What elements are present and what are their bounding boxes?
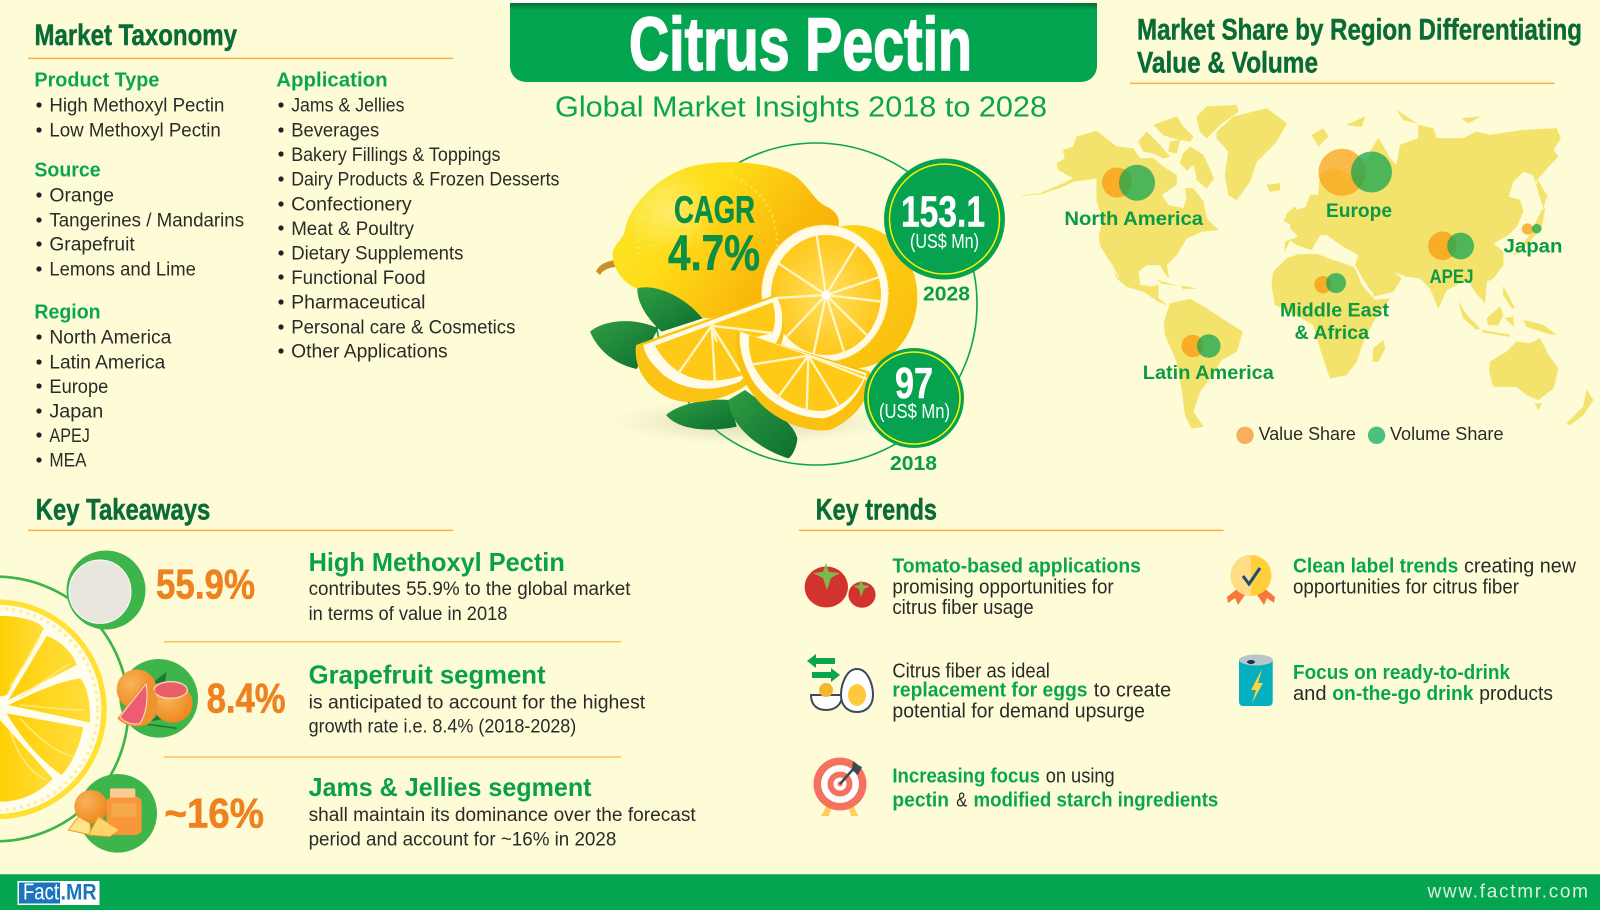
map region labels: North America (1064, 208, 1203, 230)
stat: grapefruit segment (207, 659, 646, 738)
list: application: Confectionery (291, 194, 412, 215)
stat: high methoxyl pectin: in terms of value in 2018 (309, 604, 507, 625)
list: application: Other Applications (291, 342, 448, 363)
list: region: MEA (49, 451, 87, 472)
list: application: Bakery Fillings & Toppings (291, 145, 500, 166)
title: Citrus Pectin (629, 2, 972, 86)
stat: grapefruit segment: is anticipated to account for the highest (309, 692, 646, 713)
panel: market share by region (1022, 13, 1593, 444)
list: application: Personal care & Cosmetics (291, 317, 515, 338)
bubbles: North America (1102, 165, 1155, 201)
trend: tomato-based applications: citrus fiber usage (892, 597, 1034, 619)
ring connecting market values (655, 143, 977, 465)
map region labels: Latin America (1143, 362, 1274, 384)
list: source: Tangerines / Mandarins (49, 210, 244, 231)
illustration: big lemon slice (0, 577, 128, 841)
badge: 2028 value: 153.1 (901, 188, 985, 237)
icon: egg replacement (807, 654, 873, 712)
badge: 2018 value: 97 (895, 359, 933, 408)
list: region: Japan (49, 401, 103, 422)
stat: jams and jellies segment: shall maintain its dominance over the forecast (309, 805, 696, 826)
stat: grapefruit segment: growth rate i.e. 8.4% (2018-2028) (309, 717, 576, 738)
map region labels: & Africa (1294, 322, 1369, 344)
list: application: Beverages (291, 120, 379, 141)
trend: clean label trends (1293, 555, 1577, 598)
map legend: Volume Share (1390, 424, 1504, 444)
list: application (276, 70, 559, 363)
list: product type: High Methoxyl Pectin (49, 96, 224, 117)
bubbles: Middle East and Africa (1314, 273, 1346, 293)
list: application: Application (276, 70, 388, 92)
trend: modified starch ingredients: modified starch ingredients (974, 790, 1218, 812)
badge: 2028 value: 2028 (923, 284, 970, 306)
stat: grapefruit segment: Grapefruit segment (309, 659, 546, 689)
trend: ready-to-drink: on-the-go drink (1332, 683, 1474, 705)
stat: jams and jellies segment: Jams & Jellies segment (309, 772, 592, 802)
footer bar (0, 874, 1600, 910)
bubbles: Japan (1522, 223, 1541, 235)
trend: tomato-based applications: promising opportunities for (892, 576, 1114, 598)
stat: jams and jellies segment (164, 772, 696, 850)
list: application: Dairy Products & Frozen Desserts (291, 170, 559, 191)
title banner (494, 0, 1097, 86)
stat: high methoxyl pectin (156, 547, 631, 625)
map region labels: Japan (1504, 235, 1562, 257)
list: product type (34, 70, 224, 141)
list: region: North America (49, 328, 172, 349)
map region labels: Europe (1326, 200, 1392, 222)
trend: replacement for eggs: to create (1094, 680, 1171, 702)
stat: high methoxyl pectin: contributes 55.9% to the global market (309, 579, 631, 600)
trend: tomato-based applications (892, 555, 1141, 619)
stat: high methoxyl pectin: High Methoxyl Pectin (309, 547, 565, 577)
icon: drink can (1239, 654, 1273, 706)
trend: modified starch ingredients: pectin (892, 790, 949, 812)
icon: jam jar and oranges (68, 774, 157, 853)
heading: market share: Value & Volume (1137, 47, 1318, 80)
list: application: Pharmaceutical (291, 293, 426, 314)
panel: market taxonomy (28, 19, 559, 472)
stat: high methoxyl pectin: 55.9% (156, 560, 255, 607)
trend: ready-to-drink: and (1293, 683, 1326, 705)
list: source: Orange (49, 186, 114, 207)
badge: 2018 value: 2018 (890, 453, 937, 475)
trend: modified starch ingredients: & (956, 790, 968, 812)
heading: market taxonomy: Market Taxonomy (34, 19, 237, 52)
logo: Fact.MR: .MR (60, 879, 97, 904)
icon: medal (1227, 555, 1275, 605)
trend: ready-to-drink: Focus on ready-to-drink (1293, 662, 1511, 684)
list: region: APEJ (49, 426, 90, 447)
list: application: Jams & Jellies (291, 96, 404, 117)
icon: target (814, 758, 866, 816)
list: region: Latin America (49, 352, 166, 373)
trend: tomato-based applications: Tomato-based applications (892, 555, 1141, 577)
list: application: Functional Food (291, 268, 426, 289)
trend: ready-to-drink (1293, 662, 1553, 705)
stat: grapefruit segment: 8.4% (207, 675, 286, 722)
list: region: Region (34, 301, 101, 323)
trend: modified starch ingredients: on using (1046, 765, 1115, 787)
map legend: Value Share (1259, 424, 1356, 444)
map region labels (1064, 200, 1562, 384)
icon: powder (66, 550, 146, 630)
illustration: lemons and leaves (590, 162, 917, 458)
list: source: Lemons and Lime (49, 259, 196, 280)
trend: modified starch ingredients: Increasing focus (892, 765, 1040, 787)
callout: CAGR: CAGR (674, 190, 755, 232)
logo: Fact.MR: Fact (23, 878, 59, 904)
map legend (1236, 424, 1504, 444)
panel: market size with lemon illustration (590, 143, 1005, 475)
trend: clean label trends: creating new (1464, 555, 1577, 577)
trend: replacement for eggs: Citrus fiber as ideal (892, 660, 1050, 682)
bubbles: Latin America (1182, 334, 1220, 358)
trend: replacement for eggs: replacement for eggs (892, 680, 1088, 702)
list: source: Grapefruit (49, 235, 135, 256)
stat: jams and jellies segment: ~16% (164, 790, 264, 837)
list: product type: Low Methoxyl Pectin (49, 120, 221, 141)
list: region (34, 301, 172, 472)
trend: modified starch ingredients (892, 765, 1218, 812)
panel: key takeaways (0, 493, 696, 853)
world map (1022, 105, 1593, 428)
list: source: Source (34, 160, 101, 182)
logo: Fact.MR (18, 878, 100, 905)
heading: key trends: Key trends (816, 493, 937, 526)
icon: grapefruit (117, 659, 198, 738)
trend: clean label trends: Clean label trends (1293, 555, 1458, 577)
icon: tomatoes (805, 563, 876, 608)
callout: CAGR: 4.7% (668, 225, 760, 281)
subtitle: Global Market Insights 2018 to 2028 (555, 92, 1047, 124)
trend: replacement for eggs (892, 660, 1171, 722)
callout: CAGR (668, 190, 760, 281)
trend: replacement for eggs: potential for demand upsurge (892, 700, 1145, 722)
list: region: Europe (49, 377, 108, 398)
list: source (34, 160, 244, 280)
trend: ready-to-drink: products (1479, 683, 1553, 705)
website url: www.factmr.com (1426, 881, 1588, 902)
map region labels: Middle East (1280, 300, 1390, 322)
bubbles: Europe (1318, 149, 1392, 196)
stat: jams and jellies segment: period and account for ~16% in 2028 (309, 829, 616, 850)
bubbles: APEJ (1428, 232, 1474, 260)
map region labels: APEJ (1430, 266, 1474, 288)
list: application: Dietary Supplements (291, 244, 463, 265)
badge: 2028 value (884, 158, 1005, 306)
trend: clean label trends: opportunities for citrus fiber (1293, 576, 1519, 598)
badge: 2018 value: (US$ Mn) (879, 401, 950, 423)
heading: market share (1130, 13, 1582, 84)
heading: key takeaways: Key Takeaways (36, 493, 210, 526)
badge: 2028 value: (US$ Mn) (910, 231, 979, 253)
list: product type: Product Type (34, 70, 159, 92)
badge: 2018 value (864, 348, 964, 475)
list: application: Meat & Poultry (291, 219, 414, 240)
panel: key trends (799, 493, 1577, 816)
